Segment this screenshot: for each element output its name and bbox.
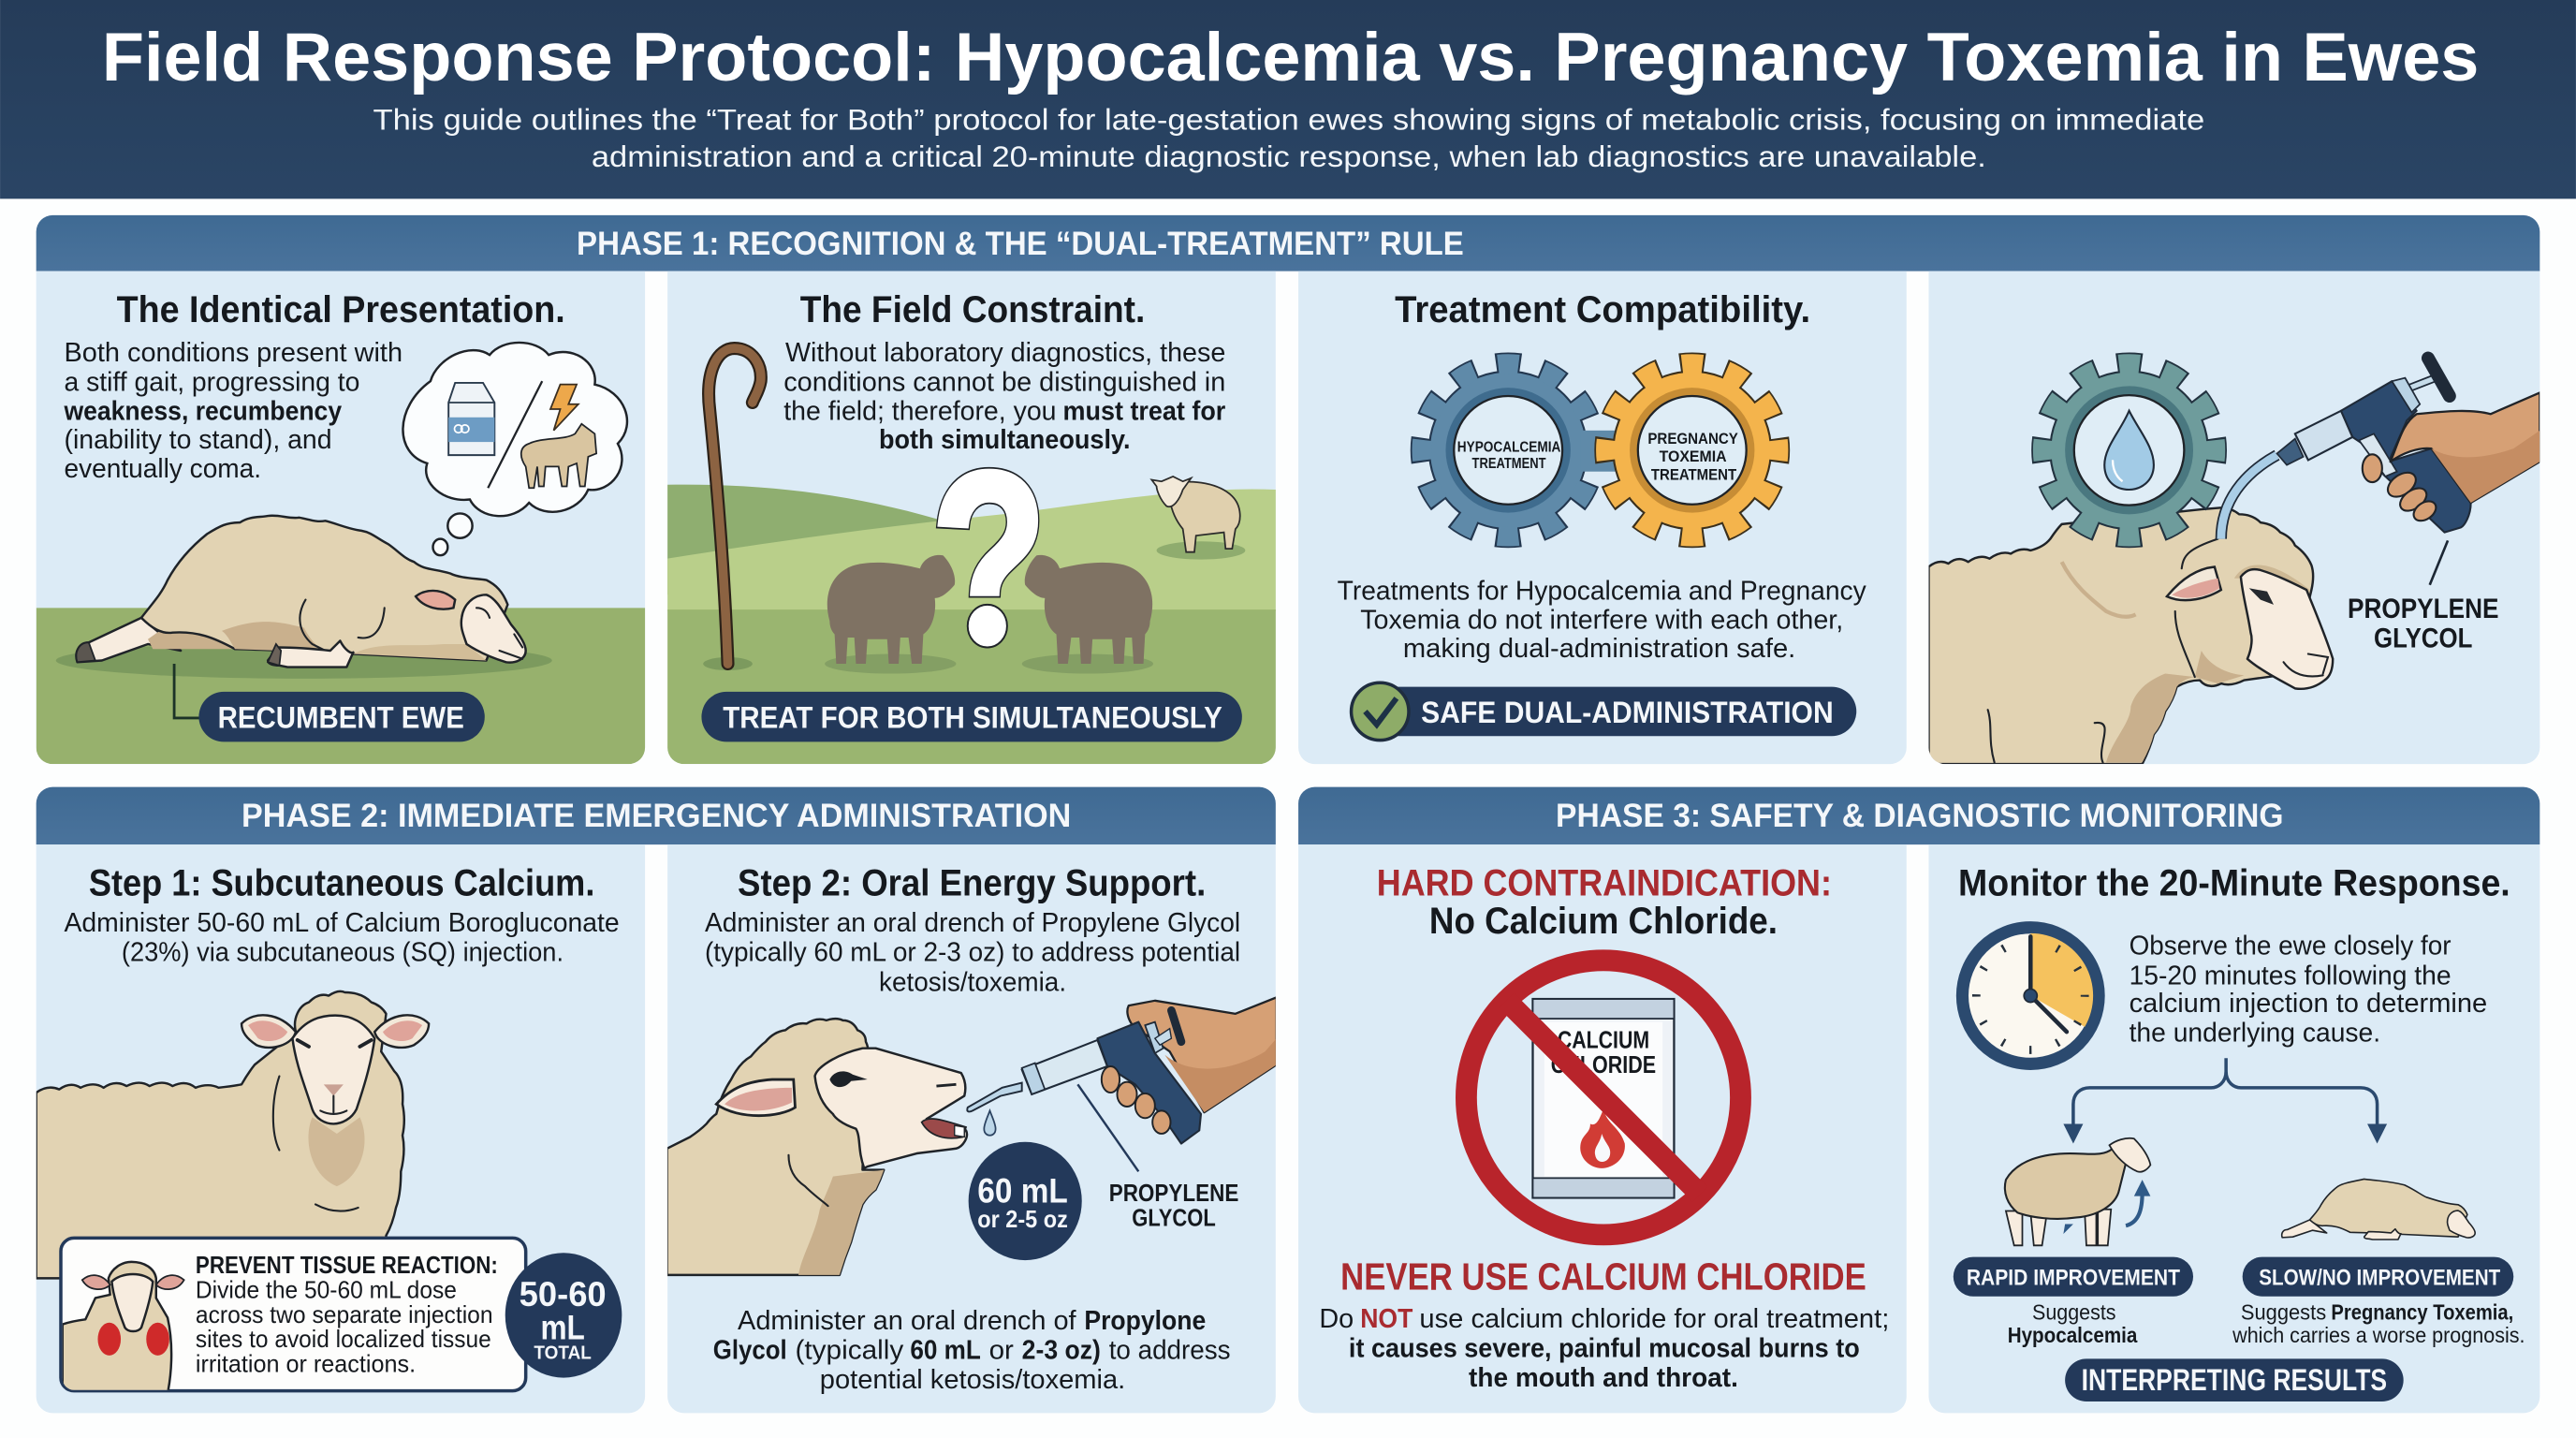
illustration: ewe receiving drench [667,1019,967,1275]
icon: silhouette sheep right [1025,555,1152,664]
heading: Monitor the 20-Minute Response. [1958,862,2510,903]
body text: Treatments for Hypocalcemia and Pregnancy [1338,577,1866,607]
body text: the mouth and throat. [1469,1363,1738,1393]
heading [1377,862,1832,942]
icon: prohibition sign [1466,961,1741,1235]
icon: standing sheep [2005,1138,2150,1245]
phase 2 header bar: PHASE 2: IMMEDIATE EMERGENCY ADMINISTRATION [242,798,1071,834]
callout text: across two separate injection [196,1302,493,1328]
badge: 50-60 mL total [505,1253,622,1378]
label: propylene glycol: PROPYLENE [2348,594,2498,624]
icon: drench gun with hand [967,997,1277,1143]
ground [37,608,646,764]
face [461,594,526,663]
badge: 60 mL [969,1142,1082,1260]
header banner [0,0,2576,198]
panel: the identical presentation [37,271,646,764]
label: propylene glycol [2348,594,2498,653]
badge: safe dual-administration [1352,682,1856,741]
phase 1 header bar: PHASE 1: RECOGNITION & THE “DUAL-TREATMENT” RULE [577,226,1464,262]
body text: weakness, recumbency [64,396,342,426]
warning heading: NEVER USE CALCIUM CHLORIDE [1340,1255,1866,1299]
gear: pregnancy toxemia treatment: PREGNANCY [1647,430,1738,448]
heading: No Calcium Chloride. [1429,901,1778,942]
label: propylene glycol: PROPYLENE [1109,1181,1238,1207]
gear: pregnancy toxemia treatment: TOXEMIA [1660,448,1727,465]
icon: clock [1962,928,2099,1064]
callout: prevent tissue reaction [61,1238,526,1393]
result text: hypocalcemia: Suggests [2032,1299,2116,1324]
heading: Treatment Compatibility. [1395,289,1810,330]
body text: calcium injection to determine [2130,989,2487,1019]
illustration: recumbent ewe [76,516,526,668]
body text: (23%) via subcutaneous (SQ) injection. [122,938,564,968]
icon: silhouette sheep left [827,555,955,664]
ear [416,591,455,609]
phase 3 header bar [1298,787,2539,844]
callout line [1077,1084,1138,1171]
icon: falling drop [984,1110,996,1136]
result text: hypocalcemia: Hypocalcemia [2008,1323,2138,1347]
gear: hypocalcemia treatment: TREATMENT [1472,456,1546,472]
subtitle: administration and a critical 20-minute diagnostic response, when lab diagnostics are unavailable. [592,139,1986,173]
icon: milk carton [448,383,494,455]
body text [64,338,402,484]
label pill: recumbent ewe: RECUMBENT EWE [218,700,464,734]
body text: must treat for [1063,396,1225,426]
icon: calcium chloride packet: CHLORIDE [1551,1052,1656,1078]
body text: Without laboratory diagnostics, these [785,338,1225,368]
body text: Administer 50-60 mL of Calcium Borogluconate [65,908,620,938]
gear: pregnancy toxemia treatment [1605,363,1779,537]
icon: question mark [936,466,1039,648]
callout text [196,1253,498,1377]
body text [705,908,1240,997]
icon: question mark: ? [931,421,1046,697]
label pill: slow/no improvement: SLOW/NO IMPROVEMENT [2259,1266,2501,1290]
result text: pregnancy toxemia: which carries a worse prognosis. [2232,1323,2525,1347]
panel: step 2 oral energy support [667,844,1277,1413]
landscape [667,485,1277,764]
body text [713,1306,1231,1395]
badge: 60 mL: or 2-5 oz [977,1207,1068,1233]
body text: making dual-administration safe. [1403,634,1795,664]
body text: NOT [1360,1304,1413,1334]
callout text: PREVENT TISSUE REACTION: [196,1253,498,1279]
label pill: treat for both [701,692,1242,741]
arrow: rising [2126,1193,2143,1225]
icon: flame [1580,1109,1625,1168]
label pill: treat for both: TREAT FOR BOTH SIMULTANEOUSLY [723,700,1222,734]
body text: both simultaneously. [879,425,1131,455]
icon: grazing sheep [1151,477,1240,552]
body text: or [989,1335,1014,1365]
callout text: irritation or reactions. [196,1351,416,1377]
heading: Step 2: Oral Energy Support. [738,862,1206,903]
body text [1338,577,1866,664]
icon: thought bubble [402,343,627,555]
body text: Administer an oral drench of Propylene Glycol [705,908,1240,938]
panel: treatment compatibility [1298,271,1907,764]
body text: Toxemia do not interfere with each other, [1360,605,1843,635]
body text: it causes severe, painful mucosal burns to [1349,1334,1860,1364]
icon: small sheep [521,424,596,488]
illustration: ewe facing forward [37,991,429,1278]
body text: Observe the ewe closely for [2130,932,2452,961]
icon: lying sheep [2282,1179,2475,1240]
body text: Do [1319,1304,1354,1334]
gear: pregnancy toxemia treatment: TREATMENT [1651,465,1736,483]
body text: use calcium chloride for oral treatment; [1419,1304,1889,1334]
panel: step 1 subcutaneous calcium [37,844,645,1413]
body text: potential ketosis/toxemia. [820,1365,1125,1395]
body text: the underlying cause. [2130,1019,2380,1049]
body text [1319,1304,1889,1393]
result text: pregnancy toxemia [2232,1299,2525,1347]
body text [783,338,1225,455]
body text: the field; therefore, you [783,396,1057,426]
panel: monitor the 20-minute response [1928,844,2539,1413]
body text: (inability to stand), and [65,425,332,455]
heading: The Field Constraint. [800,289,1145,330]
label pill: rapid improvement: RAPID IMPROVEMENT [1967,1266,2180,1290]
label: propylene glycol [1109,1181,1238,1231]
callout line [174,664,200,718]
body text: a stiff gait, progressing to [65,368,359,398]
phase 1 header bar [37,215,2539,271]
body text [2130,932,2487,1049]
heading: HARD CONTRAINDICATION: [1377,862,1832,903]
body text: (typically 60 mL or 2-3 oz) to address potential [705,938,1240,968]
subtitle: This guide outlines the “Treat for Both” protocol for late-gestation ewes showing signs of metabolic crisis, focusing on immediate [373,103,2204,137]
icon: drench gun with hand [2221,359,2539,539]
badge: 50-60 mL total: TOTAL [534,1343,592,1363]
body text: Administer an oral drench of [738,1306,1077,1336]
badge: safe dual-administration: SAFE DUAL-ADMINISTRATION [1421,696,1834,729]
icon: shepherd's crook [709,348,761,664]
panel: drench illustration [1928,271,2539,764]
icon: calcium chloride packet [1532,999,1674,1197]
label pill: interpreting results: INTERPRETING RESULTS [2082,1363,2387,1397]
body text [65,908,620,968]
arrow: branching bracket [2063,1058,2387,1143]
callout line [2430,540,2448,585]
body text: (typically [795,1335,904,1365]
phase 2 header bar [37,787,1276,844]
label pill: rapid improvement [1954,1257,2193,1297]
panel: the field constraint [667,271,1277,764]
body text: to address [1109,1335,1231,1365]
gear: hypocalcemia treatment: HYPOCALCEMIA [1457,440,1560,456]
callout text: sites to avoid localized tissue [196,1327,491,1353]
subtitle [373,103,2204,173]
body text: eventually coma. [65,454,261,484]
label: propylene glycol: GLYCOL [1132,1205,1216,1231]
mini sheep with injection sites [63,1262,184,1393]
body text: ketosis/toxemia. [879,967,1066,997]
body text: 15-20 minutes following the [2130,961,2452,990]
title: Field Response Protocol: Hypocalcemia vs. Pregnancy Toxemia in Ewes [102,18,2479,95]
gear: hypocalcemia treatment [1421,363,1623,537]
badge: 50-60 mL total: 50-60 [520,1275,607,1313]
result text: pregnancy toxemia: Pregnancy Toxemia, [2331,1299,2513,1324]
label pill: recumbent ewe [198,692,485,741]
badge: 50-60 mL total: mL [540,1308,585,1346]
heading: The Identical Presentation. [117,289,565,330]
label pill: interpreting results [2065,1358,2404,1401]
front leg [268,640,353,668]
phase 3 header bar: PHASE 3: SAFETY & DIAGNOSTIC MONITORING [1556,798,2284,834]
icon: lightning bolt [550,385,578,431]
body text: 2-3 oz) [1022,1335,1101,1365]
badge: 60 mL: 60 mL [977,1172,1068,1211]
panel: hard contraindication [1298,844,1907,1413]
result text: pregnancy toxemia: Suggests [2241,1299,2326,1324]
label pill: slow/no improvement [2243,1257,2513,1297]
heading: Step 1: Subcutaneous Calcium. [89,862,594,903]
label: propylene glycol: GLYCOL [2374,623,2472,653]
body text: Propylone [1084,1306,1206,1336]
body text: 60 mL [910,1335,981,1365]
gear: water drop [2042,363,2217,537]
body text: conditions cannot be distinguished in [783,368,1225,398]
result text: hypocalcemia [2008,1299,2138,1347]
icon: question mark: ? [931,421,1046,697]
body text: Glycol [713,1335,787,1365]
illustration: ewe with applicator [1928,507,2333,764]
body text: Both conditions present with [65,338,402,368]
callout text: Divide the 50-60 mL dose [196,1277,457,1303]
icon: calcium chloride packet: CALCIUM [1558,1028,1649,1054]
